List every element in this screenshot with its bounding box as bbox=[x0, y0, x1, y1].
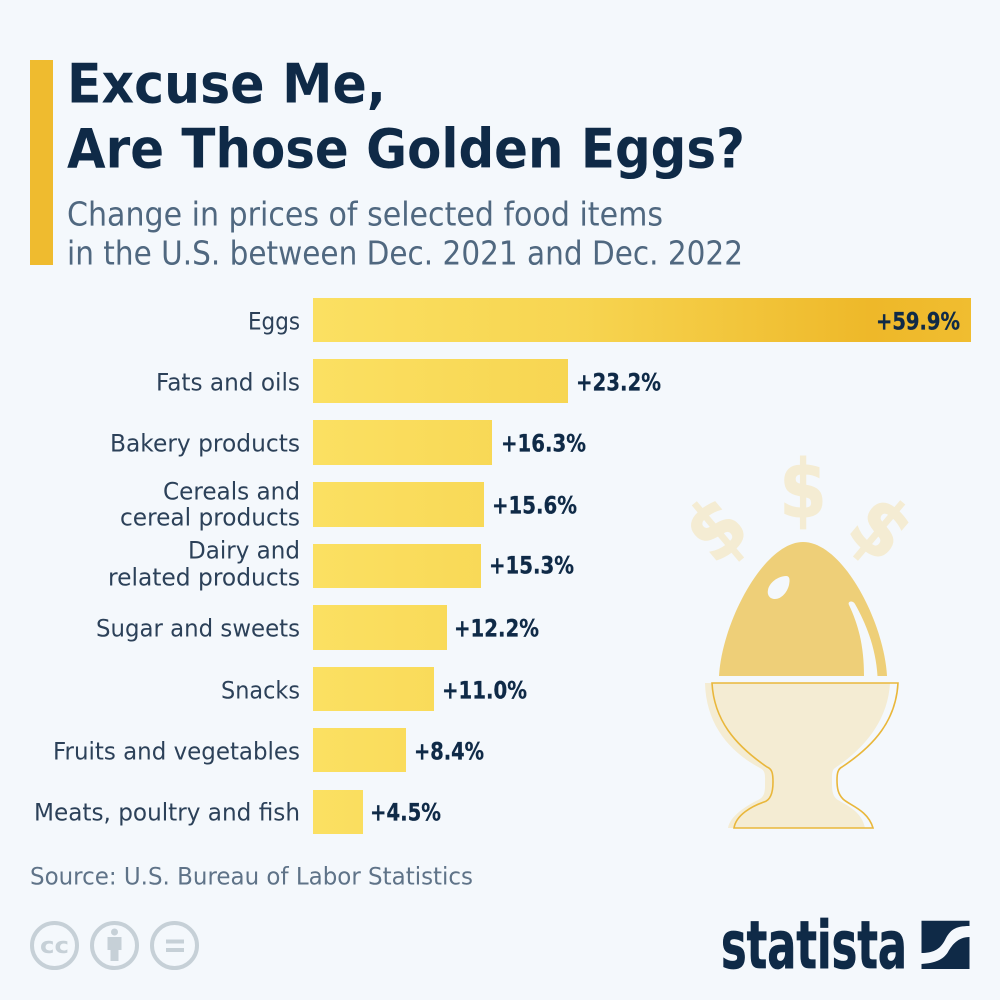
icon: no derivatives bbox=[152, 923, 197, 968]
row: Sugar and sweets bbox=[96, 605, 539, 650]
row: Snacks bbox=[221, 667, 527, 711]
row: Meats, poultry and fish: Meats, poultry and fish bbox=[34, 798, 300, 826]
row: Cereals and cereal products bbox=[120, 478, 577, 532]
row: Dairy and related products: Dairy and bbox=[188, 536, 300, 564]
row: Sugar and sweets: +12.2% bbox=[454, 614, 539, 642]
icon: egg bbox=[719, 542, 887, 676]
source: Source: U.S. Bureau of Labor Statistics bbox=[30, 862, 473, 890]
row: Meats, poultry and fish: +4.5% bbox=[370, 798, 441, 826]
title: Are Those Golden Eggs? bbox=[67, 118, 745, 180]
row: Bakery products: +16.3% bbox=[501, 430, 586, 458]
row: Fruits and vegetables: +8.4% bbox=[414, 738, 484, 766]
subtitle bbox=[67, 196, 743, 272]
statista logo: statista bbox=[721, 907, 907, 984]
row: Eggs bbox=[248, 298, 971, 342]
row: Dairy and related products bbox=[108, 536, 574, 592]
row: Sugar and sweets: Sugar and sweets bbox=[96, 614, 300, 642]
icon: dollar signs bbox=[666, 443, 931, 581]
bar chart bbox=[34, 298, 971, 834]
row: Fats and oils: Fats and oils bbox=[156, 368, 300, 396]
row: Cereals and cereal products: cereal products bbox=[120, 504, 300, 532]
title bbox=[67, 52, 745, 180]
row: Fats and oils: +23.2% bbox=[576, 368, 661, 396]
row: Eggs: +59.9% bbox=[876, 308, 960, 336]
row: Bakery products: Bakery products bbox=[110, 430, 300, 458]
row: Bakery products bbox=[110, 420, 586, 465]
subtitle: Change in prices of selected food items bbox=[67, 196, 663, 234]
row: Fruits and vegetables: Fruits and vegetables bbox=[53, 738, 300, 766]
icon: cc: cc bbox=[40, 934, 69, 959]
row: Dairy and related products: related products bbox=[108, 564, 300, 592]
icon: creative commons licence bbox=[32, 923, 197, 968]
icon: egg cup bbox=[705, 683, 898, 828]
title: Excuse Me, bbox=[67, 52, 386, 116]
row: Snacks: +11.0% bbox=[442, 676, 527, 704]
icon: statista mark bbox=[922, 921, 970, 969]
row: Cereals and cereal products: +15.6% bbox=[492, 492, 577, 520]
row: Fats and oils bbox=[156, 359, 661, 403]
row: Eggs: Eggs bbox=[248, 308, 300, 336]
subtitle: in the U.S. between Dec. 2021 and Dec. 2022 bbox=[67, 234, 743, 272]
title accent bar bbox=[30, 60, 53, 265]
row: Meats, poultry and fish bbox=[34, 790, 441, 834]
icon: attribution bbox=[92, 923, 137, 968]
icon: dollar signs: $ bbox=[666, 477, 765, 581]
icon: dollar signs: $ bbox=[832, 476, 931, 580]
icon: dollar signs: $ bbox=[779, 443, 827, 536]
row: Snacks: Snacks bbox=[221, 676, 300, 704]
row: Fruits and vegetables bbox=[53, 728, 484, 772]
icon: cc bbox=[32, 923, 77, 968]
row: Dairy and related products: +15.3% bbox=[489, 552, 574, 580]
illustration: golden egg in cup bbox=[666, 443, 931, 828]
row: Cereals and cereal products: Cereals and bbox=[163, 478, 300, 506]
